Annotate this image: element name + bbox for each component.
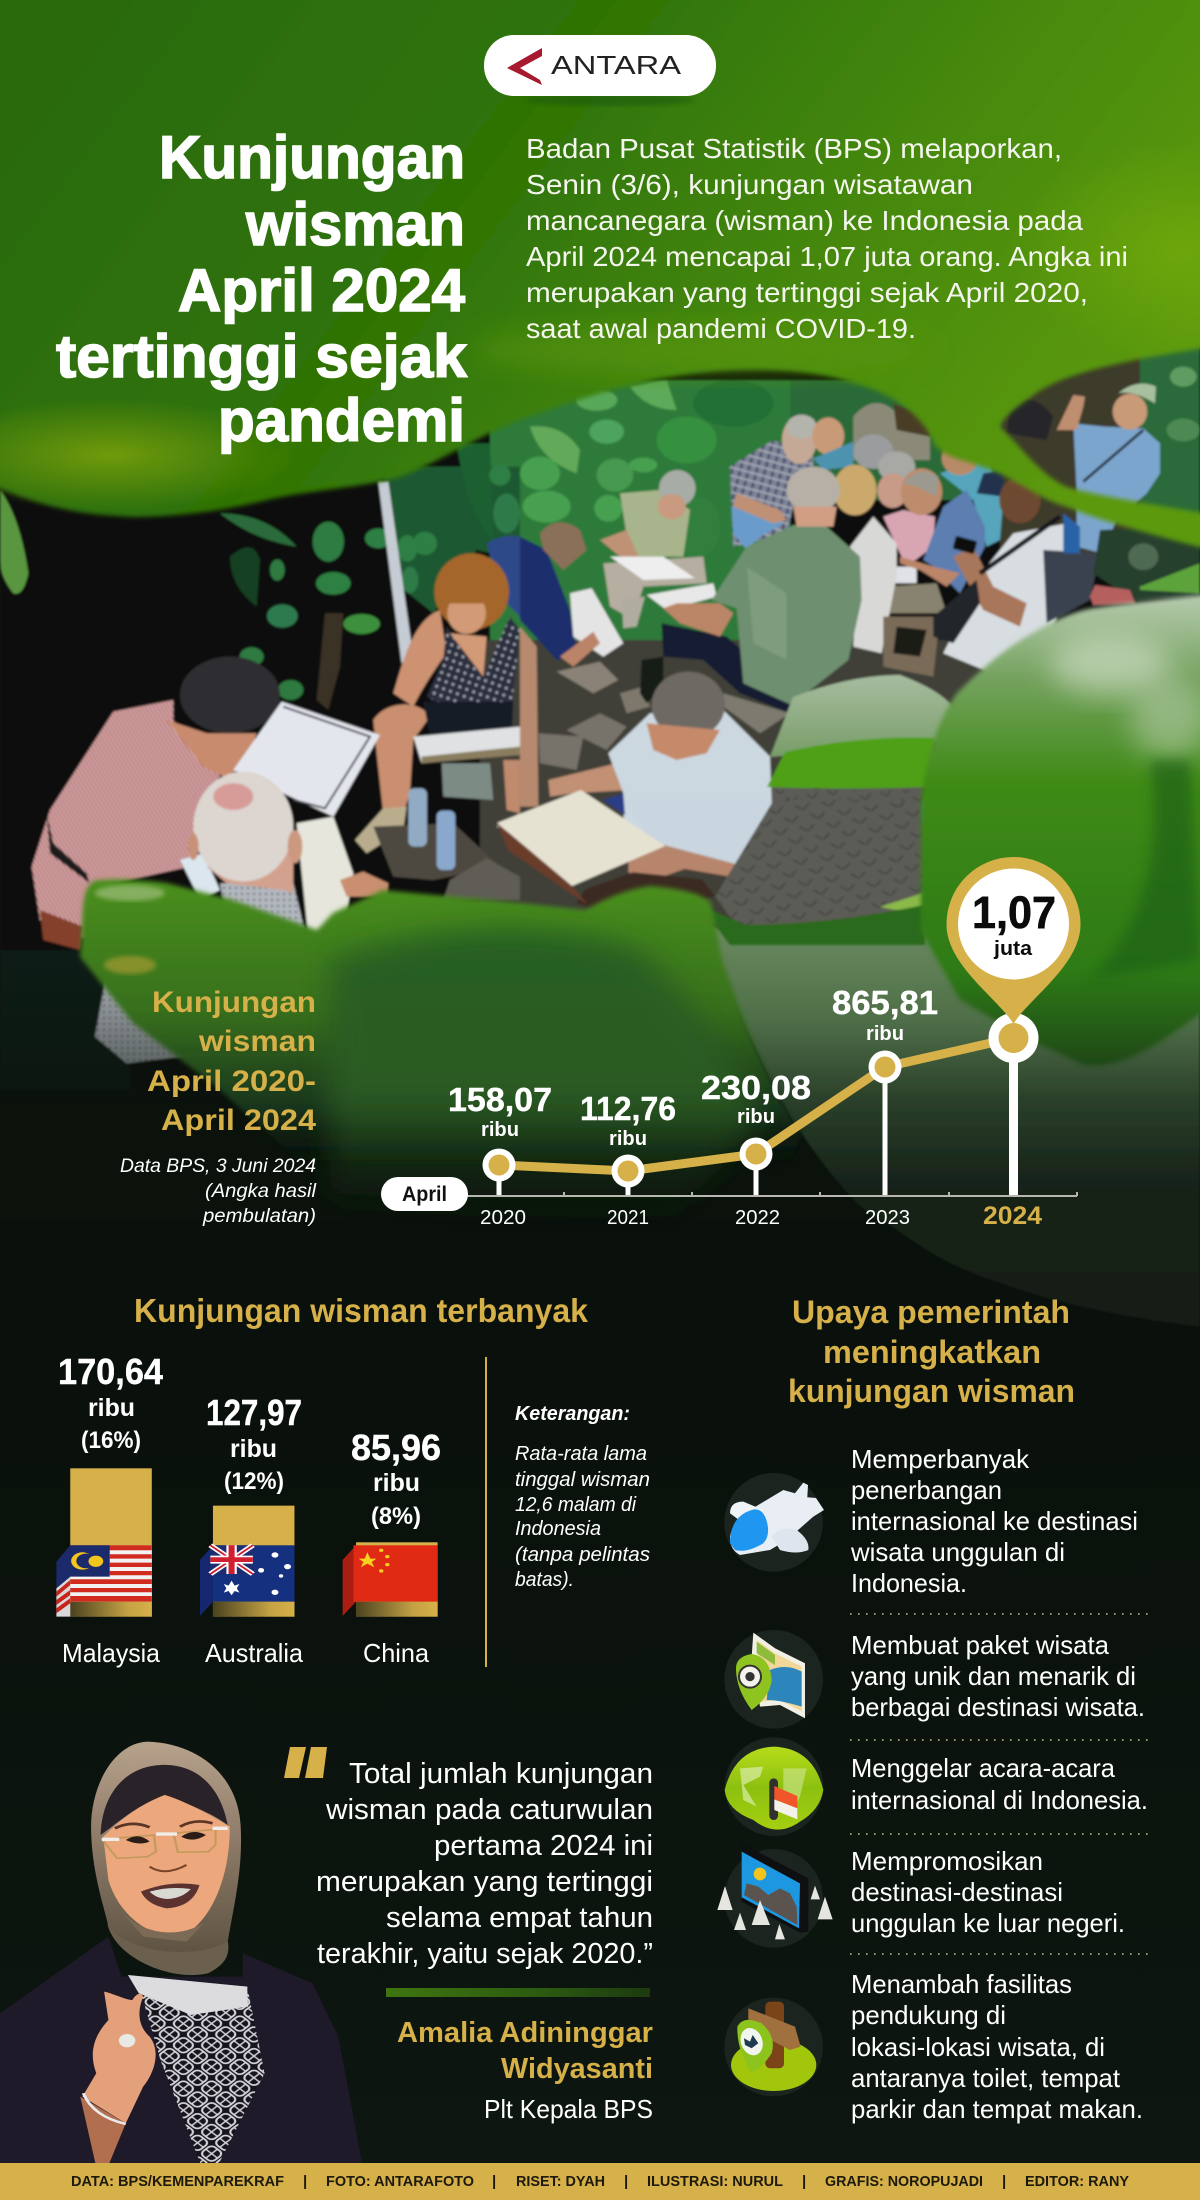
icon: airplane [724,1473,824,1572]
intro paragraph: saat awal pandemi COVID-19. [526,313,916,344]
value labels: 865,81 [832,984,938,1021]
photo backdrop [0,340,1200,1100]
year labels: 2022 [735,1207,780,1229]
foreground leaf: thin dark-green strip [700,905,925,945]
chart source note: Data BPS, 3 Juni 2024 [120,1156,316,1177]
credits: | [624,2173,628,2190]
pin: 1,07 juta [946,857,1081,1024]
title: wisman [245,191,465,258]
item 1 text: internasional ke destinasi [851,1506,1138,1536]
chart heading: April 2020- [147,1065,316,1098]
China value: 85,96 [351,1427,441,1468]
April pill: April [402,1183,447,1206]
batik paper on board [497,790,665,886]
eyebrows [115,1821,213,1828]
item 1 text: penerbangan [851,1475,1002,1505]
item 2 text: yang unik dan menarik di [851,1661,1136,1691]
Malaysia value: 170,64 [58,1351,163,1392]
2024 pole [1009,1038,1018,1195]
forearm [80,2097,126,2163]
item 5 text: antaranya toilet, tempat [851,2063,1121,2093]
year labels: 2024 [983,1202,1042,1230]
foreground leaf: dark central shade [330,930,760,1230]
note: Keterangan: [515,1403,630,1425]
value labels: 158,07 [448,1081,552,1118]
dark fade over lower photo [0,960,1200,1220]
heading: kunjungan wisman [788,1373,1075,1409]
board edge [497,823,588,905]
credits: ILUSTRASI: NURUL [647,2173,783,2190]
year labels [480,1202,1042,1230]
face [103,1795,230,1937]
credits: | [802,2173,806,2190]
foreground leaf: right giant [921,593,1200,1066]
icon: globe with flag [725,1737,823,1836]
quote text: terakhir, yaitu sejak 2020.” [317,1938,653,1970]
body [0,1937,362,2163]
lower left hidden figure [40,910,233,1063]
credits: | [492,2173,496,2190]
lighter curved dark leaf at lower right [700,920,1200,1327]
item 2 text [851,1630,1145,1722]
heading: Upaya pemerintah [792,1294,1070,1330]
footer credit bar [0,2163,1200,2200]
Malaysia value [58,1351,163,1454]
title [56,124,468,454]
quote text [316,1758,653,1970]
chart source note [120,1156,317,1227]
heading: meningkatkan [823,1334,1041,1370]
speaker role: Plt Kepala BPS [484,2094,653,2124]
item 1 text: Memperbanyak [851,1444,1030,1474]
note: 12,6 malam di [515,1494,637,1516]
line chart: April 2020-2024 [381,857,1081,1230]
foreground leaf: orange spot [104,956,156,974]
logo shadow [525,94,695,106]
note: Rata-rata lama [515,1443,647,1465]
China value: ribu [373,1469,420,1497]
note: tinggal wisman [515,1469,650,1491]
title: tertinggi sejak [56,323,468,390]
pin: 1,07 juta: juta [993,938,1033,960]
photo: tourists learning batik in a garden [0,340,1200,1100]
item 4 text [851,1846,1125,1938]
right leaf: light highlight [1050,635,1170,695]
intro paragraph [526,133,1128,344]
eyes [126,1832,206,1843]
item 1 text: Indonesia. [851,1568,967,1598]
title: pandemi [218,387,465,454]
scarf collar [108,1925,228,1975]
glasses [102,1829,216,1858]
inner cap [101,1765,228,1835]
intro paragraph: mancanegara (wisman) ke Indonesia pada [526,205,1083,236]
mouth [141,1883,200,1908]
quote text: Total jumlah kunjungan [349,1758,653,1790]
quote text: selama empat tahun [386,1902,653,1934]
value labels: 230,08 [701,1069,811,1106]
quote text: pertama 2024 ini [434,1830,653,1862]
value labels: ribu [737,1106,775,1128]
Australia value: ribu [230,1435,277,1463]
foreground leaf: left large [80,879,802,1190]
April pill [381,1177,468,1211]
item 4 text: destinasi-destinasi [851,1877,1063,1907]
striped-shirt man and white-haired man [32,657,388,993]
Australia value: 127,97 [206,1392,302,1433]
heading: Kunjungan wisman terbanyak [134,1292,589,1329]
country labels: Malaysia [62,1638,161,1668]
title: Kunjungan [159,124,465,191]
speaker name: Widyasanti [501,2053,653,2085]
quote text: wisman pada caturwulan [325,1794,653,1826]
lower arm, shirt and brick floor [576,800,923,945]
value labels [448,984,938,1150]
pin: 1,07 juta: 1,07 [972,887,1056,938]
value labels: 112,76 [580,1090,676,1127]
item 1 text [850,1444,1138,1598]
item 3 text: internasional di Indonesia. [851,1785,1148,1815]
chart heading [147,986,316,1137]
trend line [499,1038,1013,1171]
note: (tanpa pelintas [515,1544,650,1566]
year labels: 2023 [865,1207,910,1229]
icon: signpost with pin [724,1998,823,2096]
foreground leaf: upper bright patch [770,675,953,757]
Malaysia value: ribu [88,1394,135,1422]
central group of seated tourists [520,380,1080,860]
item 1 text: wisata unggulan di [850,1537,1065,1567]
right leaf: second highlight [1130,680,1200,760]
bars with flags [56,1468,438,1617]
poles [499,1067,885,1195]
right glow [1010,140,1200,360]
value labels: ribu [481,1119,519,1141]
bar: Australia [200,1506,294,1617]
axis [467,1192,1077,1196]
foreground leaf: lower bright patch [767,738,935,788]
icon: map and pin [724,1630,823,1729]
intro paragraph: April 2024 mencapai 1,07 juta orang. Angka ini [526,241,1128,272]
chart source note: pembulatan) [202,1206,316,1227]
intro paragraph: merupakan yang tertinggi sejak April 2020, [526,277,1088,308]
lower left yellow-green glow [0,399,300,511]
item 3 text [851,1753,1148,1815]
item 5 text: lokasi-lokasi wisata, di [851,2032,1105,2062]
ring [119,2034,135,2047]
credits: | [303,2173,307,2190]
item 4 text: unggulan ke luar negeri. [851,1908,1125,1938]
logo pill [484,35,716,96]
credits: GRAFIS: NOROPUJADI [825,2173,983,2190]
year labels: 2020 [480,1207,526,1229]
item 5 text: parkir dan tempat makan. [851,2094,1143,2124]
value labels: ribu [609,1128,647,1150]
chart source note: (Angka hasil [205,1181,317,1202]
note: Indonesia [515,1518,601,1540]
foreground leaf: highlight patch [95,885,165,901]
hijab [91,1742,241,1952]
bar: Malaysia [56,1468,152,1617]
country labels [62,1638,430,1668]
quote mark [284,1747,327,1778]
panel: government efforts [717,1294,1148,2124]
right leaf: centre dark band [1090,760,1200,980]
country labels: Australia [205,1638,304,1668]
bracelet [83,2093,126,2124]
China value [351,1427,441,1530]
logo text: ANTARA [551,50,682,80]
note: batas). [515,1569,574,1591]
credits: | [1002,2173,1006,2190]
hand [82,1992,156,2123]
man in blue shirt and cap [1007,350,1200,623]
value labels: ribu [866,1023,904,1045]
item 5 text: pendukung di [851,2000,1006,2030]
teeth [150,1888,191,1899]
chart heading: wisman [198,1025,316,1058]
glasses top bar [102,1828,228,1839]
lower central glow [470,326,930,374]
China value: (8%) [371,1503,421,1530]
logo [484,35,716,106]
top leaf covering the header [0,0,1200,552]
Australia value [206,1392,302,1495]
chart heading: Kunjungan [152,986,316,1019]
neck shadow [117,1907,204,1942]
quote text: merupakan yang tertinggi [316,1866,653,1898]
item 4 text: Mempromosikan [851,1846,1043,1876]
Malaysia value: (16%) [81,1427,141,1454]
panel: top visitor countries [56,1292,650,1668]
blouse pattern [128,1975,265,2163]
title: April 2024 [178,257,466,324]
quote divider [386,1988,650,1997]
year labels: 2021 [607,1207,649,1229]
country labels: China [363,1638,430,1668]
heading [788,1294,1075,1409]
credits [71,2173,1129,2190]
divider [485,1357,487,1667]
credits: DATA: BPS/KEMENPAREKRAF [71,2173,284,2190]
markers [482,1013,1038,1188]
item 2 text: Membuat paket wisata [851,1630,1110,1660]
logo mark [507,48,542,85]
item 3 text: Menggelar acara-acara [851,1753,1116,1783]
portrait: Amalia Adininggar Widyasanti [0,1742,362,2163]
credits: EDITOR: RANY [1025,2173,1129,2190]
bar: China [343,1542,438,1617]
item 5 text: Menambah fasilitas [851,1969,1072,1999]
credits: FOTO: ANTARAFOTO [326,2173,474,2190]
intro paragraph: Badan Pusat Statistik (BPS) melaporkan, [526,133,1062,164]
credits: RISET: DYAH [516,2173,605,2190]
item 2 text: berbagai destinasi wisata. [851,1692,1145,1722]
note [515,1403,650,1591]
icon: picture frame with markers [717,1843,833,1948]
speaker name [397,2017,653,2085]
intro paragraph: Senin (3/6), kunjungan wisatawan [526,169,973,200]
item 5 text [851,1969,1143,2124]
left garden and seated woman [0,443,520,900]
nose [150,1865,186,1871]
chart heading: April 2024 [161,1104,316,1137]
speaker name: Amalia Adininggar [397,2017,653,2049]
Australia value: (12%) [224,1468,284,1495]
